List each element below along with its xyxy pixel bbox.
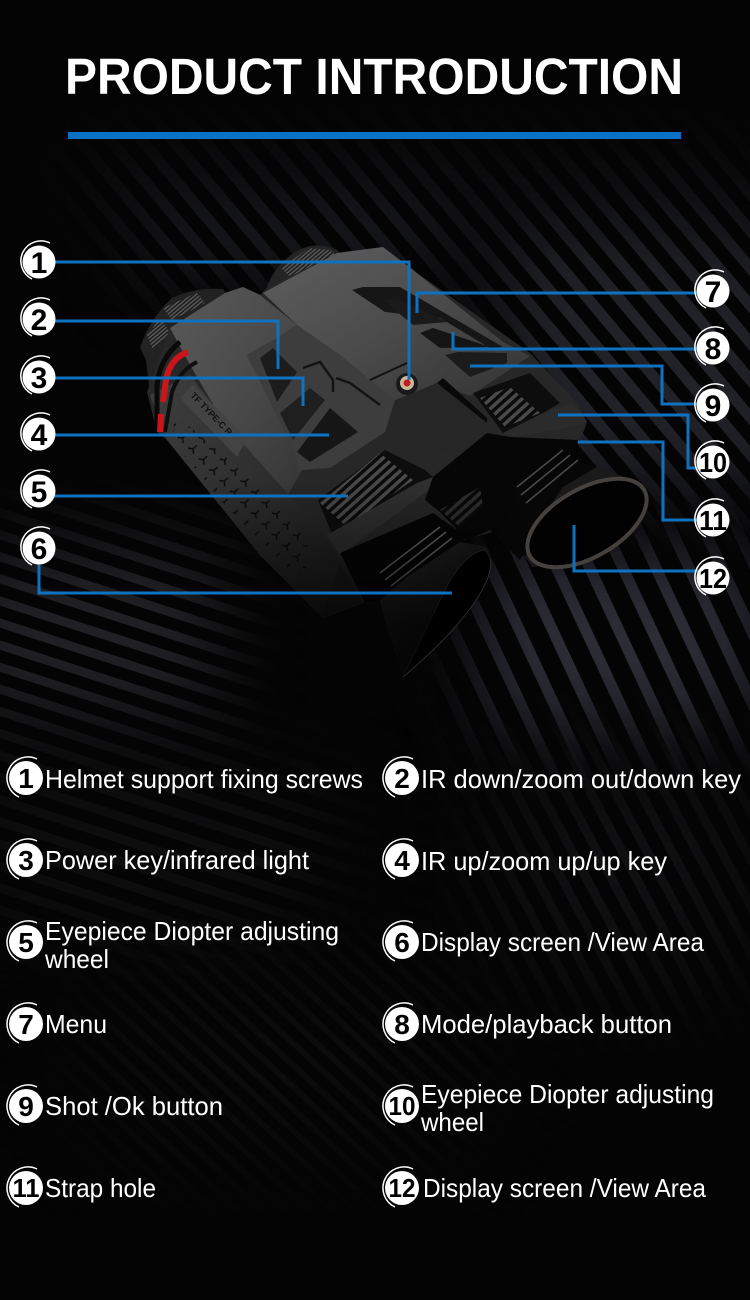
marker 8 xyxy=(695,327,730,366)
legend: item 12: 12 xyxy=(388,1173,416,1203)
legend: item 8 xyxy=(383,1003,672,1043)
dark slot xyxy=(352,287,503,348)
legend: item 5: Eyepiece Diopter adjusting xyxy=(45,916,339,946)
shot key xyxy=(445,352,507,377)
legend: item 7 xyxy=(7,1003,107,1043)
marker 1: 1 xyxy=(31,247,47,280)
legend: item 1 xyxy=(7,757,363,797)
legend: item 11 xyxy=(7,1167,156,1207)
marker 9: 9 xyxy=(705,390,721,423)
wheel knurl left xyxy=(320,453,413,527)
shell band left xyxy=(327,477,433,555)
legend: item 1: Helmet support fixing screws xyxy=(45,764,363,794)
callout lines xyxy=(39,262,700,593)
plate detail line xyxy=(370,363,407,380)
up key xyxy=(297,408,358,462)
legend: item 10: wheel xyxy=(420,1107,484,1137)
legend: item 6 xyxy=(383,921,704,961)
shell band right xyxy=(503,403,587,437)
marker 1 xyxy=(21,241,55,280)
centre rail xyxy=(395,383,487,458)
legend: item 12: Display screen /View Area xyxy=(423,1173,706,1203)
side groove xyxy=(157,342,180,432)
focus keys xyxy=(260,348,297,402)
legend: item 8: 8 xyxy=(394,1009,410,1040)
port label band xyxy=(180,385,247,457)
legend: item 5: wheel xyxy=(44,944,109,974)
marker 8: 8 xyxy=(705,333,721,366)
wheel knurl right xyxy=(480,387,540,427)
legend: item 7: Menu xyxy=(45,1009,107,1039)
legend: item 2: 2 xyxy=(394,763,410,794)
marker 9 xyxy=(695,384,730,423)
marker 3: 3 xyxy=(31,362,47,395)
left eyepiece xyxy=(340,513,491,677)
title: PRODUCT INTRODUCTION xyxy=(65,48,683,105)
legend: item 1: 1 xyxy=(18,763,34,794)
legend: item 5 xyxy=(7,916,339,974)
legend: item 9 xyxy=(7,1085,223,1125)
top plate xyxy=(263,247,530,400)
main body silhouette xyxy=(147,247,587,618)
legend: item 4: 4 xyxy=(394,845,410,876)
product: binocular device xyxy=(140,245,661,677)
rear focus wheel xyxy=(266,245,350,298)
legend: item 3: Power key/infrared light xyxy=(45,845,310,875)
marker 10: 10 xyxy=(699,447,727,478)
front-left textured shell xyxy=(170,287,302,500)
legend: item 4 xyxy=(383,839,667,879)
legend: item 6: Display screen /View Area xyxy=(421,927,704,957)
legend: item 3 xyxy=(7,839,310,879)
marker 7 xyxy=(695,270,730,309)
mode key xyxy=(420,328,490,348)
marker 6 xyxy=(21,527,55,566)
legend: item 10: Eyepiece Diopter adjusting xyxy=(421,1079,714,1109)
marker 6: 6 xyxy=(31,533,47,566)
bridge between eyepieces xyxy=(425,433,578,560)
wheel housing left xyxy=(318,450,433,553)
legend: item 6: 6 xyxy=(394,927,410,958)
legend: item 3: 3 xyxy=(18,845,34,876)
side groove right xyxy=(165,362,197,432)
marker 11 xyxy=(695,499,730,537)
marker 5: 5 xyxy=(31,476,47,509)
right eyepiece xyxy=(513,450,661,585)
screw with red dot xyxy=(396,373,418,395)
marker 11: 11 xyxy=(699,505,727,536)
legend: item 9: 9 xyxy=(18,1091,34,1122)
rail shadow xyxy=(437,378,487,423)
legend: item 4: IR up/zoom up/up key xyxy=(421,846,667,876)
marker 2 xyxy=(21,298,56,337)
strap corner xyxy=(322,563,363,617)
legend: item 9: Shot /Ok button xyxy=(45,1091,223,1121)
marker 4 xyxy=(21,413,56,452)
ridge accents xyxy=(303,362,380,405)
legend: item 5: 5 xyxy=(18,927,34,958)
side panel xyxy=(150,375,363,618)
centre-left panel xyxy=(247,325,395,470)
marker 2: 2 xyxy=(31,304,47,337)
red side stripe xyxy=(160,352,188,432)
legend: item 8: Mode/playback button xyxy=(421,1009,672,1039)
wheel housing right xyxy=(473,373,560,433)
lower shadow over body xyxy=(190,440,530,677)
legend: item 2: IR down/zoom out/down key xyxy=(421,764,741,794)
front focus wheel xyxy=(140,289,232,395)
legend: item 2 xyxy=(383,757,741,797)
bridge hinge detail xyxy=(440,487,483,527)
honeycomb grip xyxy=(172,415,308,578)
legend: item 11: 11 xyxy=(12,1173,40,1203)
port label: TF TYPE-C R xyxy=(189,390,235,438)
legend: item 11: Strap hole xyxy=(45,1173,156,1203)
background: dark diagonal stripes xyxy=(0,158,750,968)
legend: item 7: 7 xyxy=(18,1009,34,1040)
legend: item 10: 10 xyxy=(388,1091,416,1121)
marker 12: 12 xyxy=(699,563,727,594)
title underline xyxy=(68,132,681,139)
marker 4: 4 xyxy=(31,419,48,452)
menu key xyxy=(383,298,447,325)
marker 3 xyxy=(21,356,56,395)
legend: item 10 xyxy=(383,1079,714,1137)
legend: item 12 xyxy=(383,1167,706,1207)
marker 7: 7 xyxy=(705,276,721,309)
power button xyxy=(280,388,325,440)
marker 5 xyxy=(21,470,55,509)
